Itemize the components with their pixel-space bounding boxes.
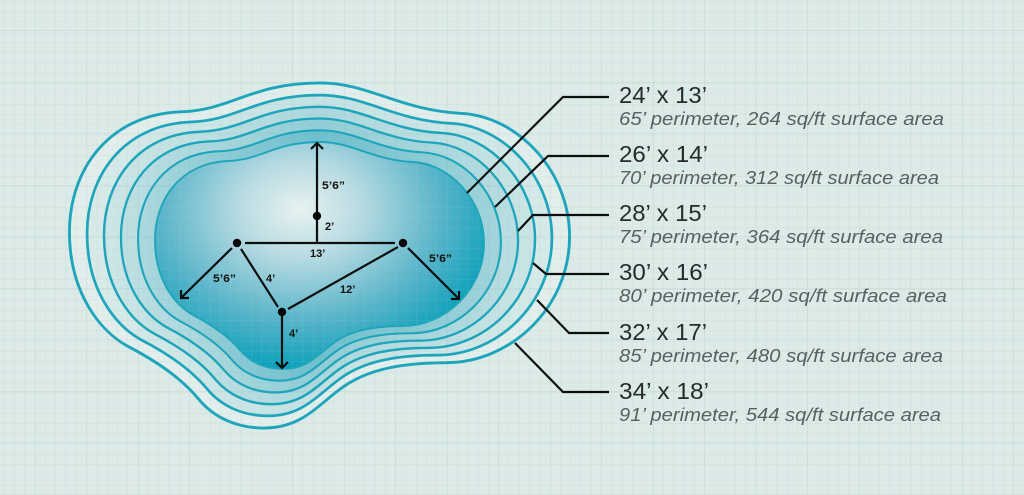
size: 28 x 15: 28’ x 15’: [619, 200, 707, 226]
contour: 24 x 13 water: [155, 142, 484, 369]
leader: 34 x 18: [515, 343, 609, 392]
size: 26 x 14: [619, 141, 939, 188]
size: 30 x 16: 80’ perimeter, 420 sq/ft surface area: [619, 286, 947, 306]
arrow: bottom 4': [276, 316, 288, 368]
leader: 28 x 15: [518, 215, 609, 231]
dimension labels: 5’6”: [429, 253, 452, 265]
arrow: left 5'6": [181, 248, 232, 298]
size: 34 x 18: [619, 378, 941, 425]
size: 24 x 13: [619, 82, 944, 129]
dimension labels: 2’: [325, 221, 334, 233]
line: 13': [245, 242, 395, 244]
size: 30 x 16: [619, 259, 947, 306]
size labels: [619, 82, 947, 425]
line: 12': [288, 247, 398, 309]
arrow: top 5'6": [311, 143, 323, 212]
size: 28 x 15: [619, 200, 943, 247]
size: 26 x 14: 26’ x 14’: [619, 141, 708, 167]
line: 4': [241, 249, 278, 307]
dimension labels: 12’: [340, 284, 355, 296]
size: 32 x 17: 32’ x 17’: [619, 319, 707, 345]
contour: 26 x 14: [138, 130, 501, 381]
size: 26 x 14: 70’ perimeter, 312 sq/ft surface area: [619, 168, 939, 188]
size: 24 x 13: 65’ perimeter, 264 sq/ft surface area: [619, 109, 944, 129]
faint grid over water: [155, 142, 484, 369]
markers: [233, 212, 407, 316]
size: 30 x 16: 30’ x 16’: [619, 259, 708, 285]
dimension lines: [181, 143, 459, 368]
dimension labels: 5’6”: [213, 273, 236, 285]
dimension labels: 4’: [289, 328, 298, 340]
line: 2': [316, 220, 318, 243]
contour: 34 x 18: [69, 83, 570, 428]
pool contours: [69, 83, 570, 428]
leader lines: [467, 97, 609, 392]
leader: 32 x 17: [537, 300, 609, 333]
size: 34 x 18: 34’ x 18’: [619, 378, 709, 404]
dimension labels: 13’: [310, 248, 325, 260]
arrow: right 5'6": [408, 248, 459, 299]
contour: 28 x 15: [121, 119, 518, 392]
size: 32 x 17: [619, 319, 943, 366]
size: 32 x 17: 85’ perimeter, 480 sq/ft surface area: [619, 346, 943, 366]
dimension labels: [213, 180, 452, 340]
leader: 24 x 13: [467, 97, 609, 193]
leader: 26 x 14: [495, 156, 609, 207]
dimension labels: 5’6”: [322, 180, 345, 192]
size: 28 x 15: 75’ perimeter, 364 sq/ft surface area: [619, 227, 943, 247]
contour: 32 x 17: [87, 95, 552, 416]
leader: 30 x 16: [533, 263, 609, 274]
contour: 30 x 16: [104, 107, 535, 404]
dimension labels: 4’: [266, 273, 275, 285]
size: 34 x 18: 91’ perimeter, 544 sq/ft surface area: [619, 405, 941, 425]
size: 24 x 13: 24’ x 13’: [619, 82, 707, 108]
